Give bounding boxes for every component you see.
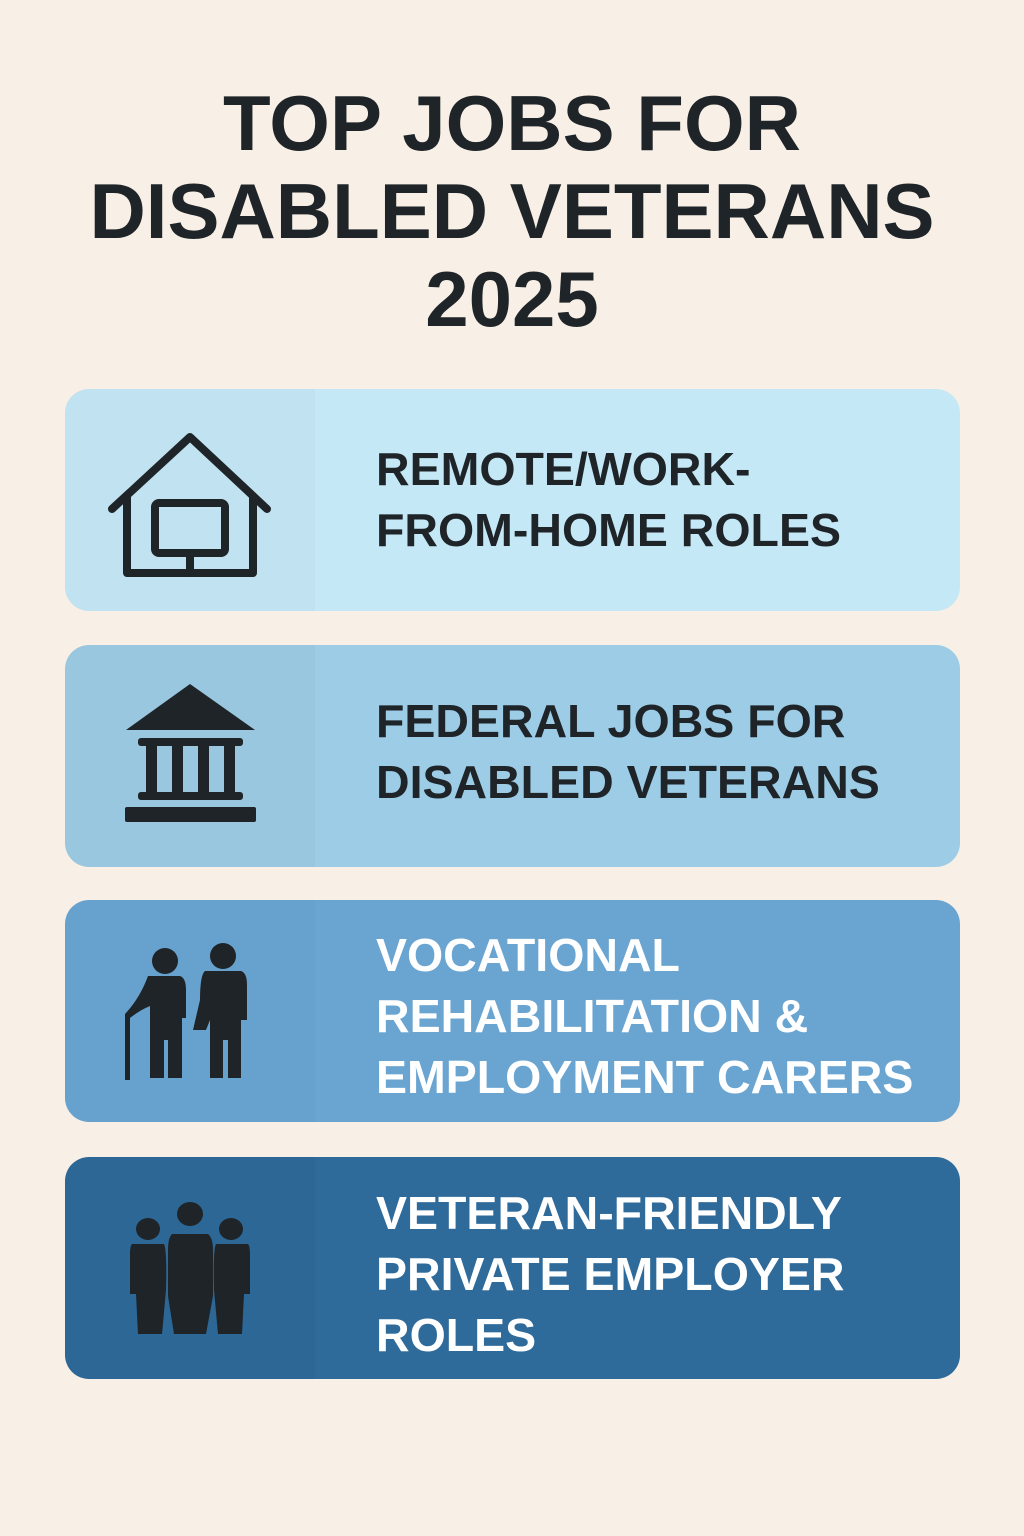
text: vocational xyxy=(376,929,913,1103)
text: remote: REMOTE/WORK- xyxy=(376,443,751,495)
icon: house xyxy=(112,437,267,573)
text: federal: DISABLED VETERANS xyxy=(376,756,880,808)
title: 2025 xyxy=(425,255,599,343)
text: vocational: REHABILITATION & xyxy=(376,990,808,1042)
text: private: ROLES xyxy=(376,1309,536,1361)
icon: bank xyxy=(125,684,256,822)
text: federal xyxy=(376,695,880,808)
text: private xyxy=(376,1187,844,1361)
icon: group xyxy=(130,1202,250,1334)
text: federal: FEDERAL JOBS FOR xyxy=(376,695,845,747)
title: TOP JOBS FOR xyxy=(223,79,801,167)
text: remote: FROM-HOME ROLES xyxy=(376,504,841,556)
icon: two people xyxy=(125,943,247,1080)
text: vocational: VOCATIONAL xyxy=(376,929,680,981)
panel: private xyxy=(65,1157,960,1379)
title xyxy=(89,79,935,343)
text: private: PRIVATE EMPLOYER xyxy=(376,1248,844,1300)
text: remote xyxy=(376,443,841,556)
text: vocational: EMPLOYMENT CARERS xyxy=(376,1051,913,1103)
panel: vocational xyxy=(65,900,960,1122)
panel: remote xyxy=(65,389,960,611)
title: DISABLED VETERANS xyxy=(89,167,935,255)
text: private: VETERAN-FRIENDLY xyxy=(376,1187,842,1239)
panel: federal xyxy=(65,645,960,867)
